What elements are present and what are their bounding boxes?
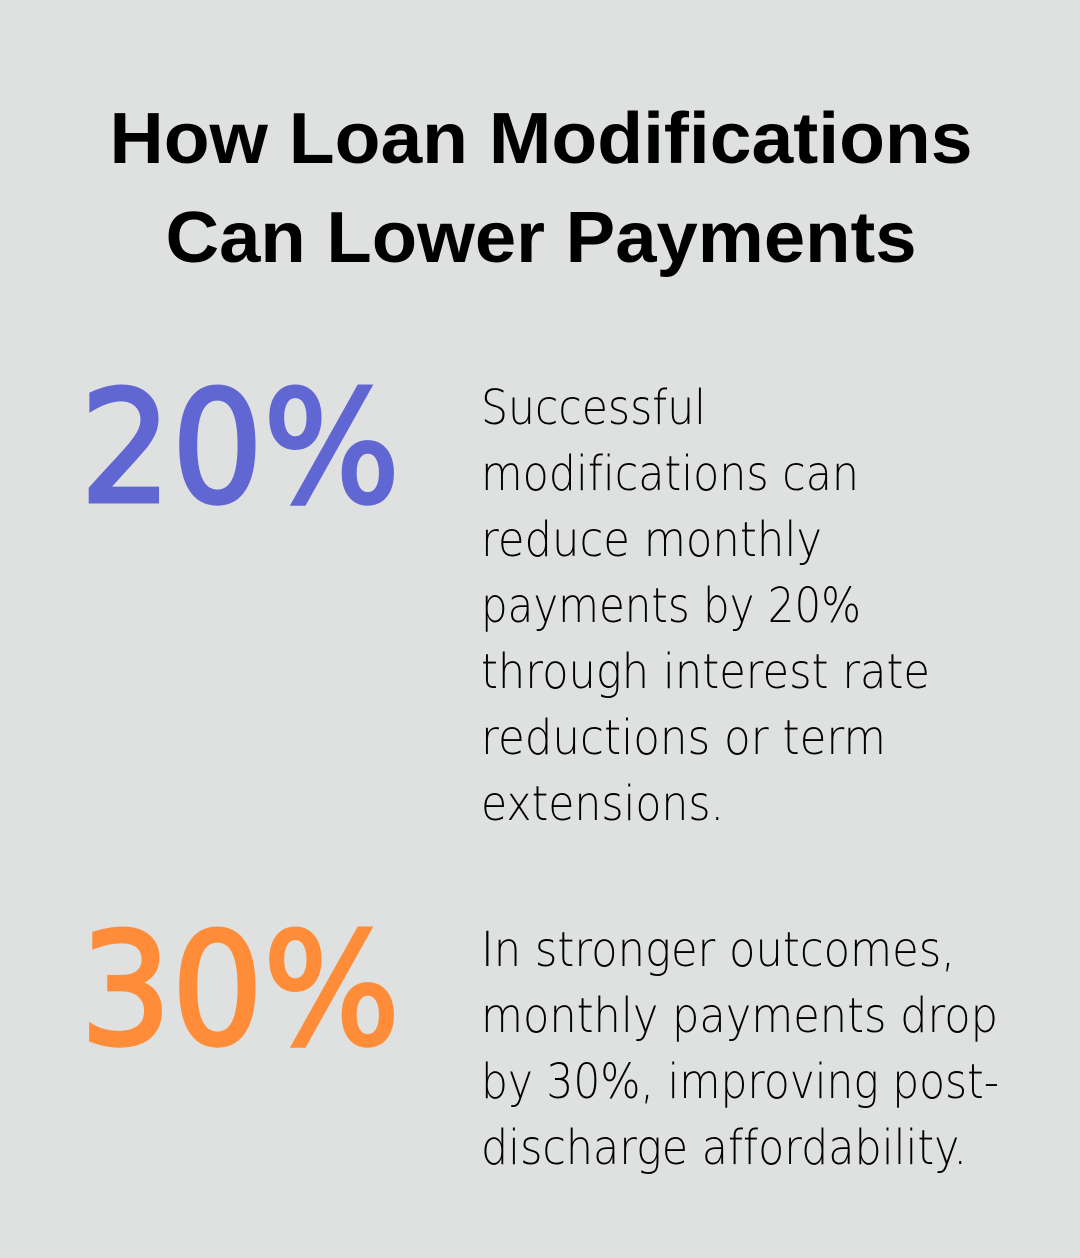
- text block: 20% description: reduce monthly: [481, 512, 822, 568]
- text block: 30% description: by 30%, improving post-: [481, 1054, 999, 1110]
- text block: 20% description: extensions.: [481, 776, 724, 832]
- title: Can Lower Payments: [166, 198, 917, 278]
- text block: 20% description: payments by 20%: [481, 578, 861, 634]
- text block: 20% description: [481, 380, 930, 832]
- big number: 20%: 20%: [80, 358, 400, 538]
- title: [110, 99, 972, 278]
- big number: 30%: 30%: [80, 900, 400, 1080]
- text block: 30% description: [481, 922, 999, 1176]
- panel: 20% statistic: [80, 358, 930, 832]
- title: How Loan Modifications: [110, 99, 972, 179]
- text block: 20% description: modifications can: [481, 446, 859, 502]
- text block: 20% description: reductions or term: [481, 710, 886, 766]
- text block: 30% description: monthly payments drop: [481, 988, 998, 1044]
- text block: 30% description: In stronger outcomes,: [481, 922, 955, 978]
- panel: 30% statistic: [80, 900, 999, 1176]
- text block: 30% description: discharge affordability.: [481, 1120, 967, 1176]
- text block: 20% description: Successful: [481, 380, 706, 436]
- text block: 20% description: through interest rate: [481, 644, 930, 700]
